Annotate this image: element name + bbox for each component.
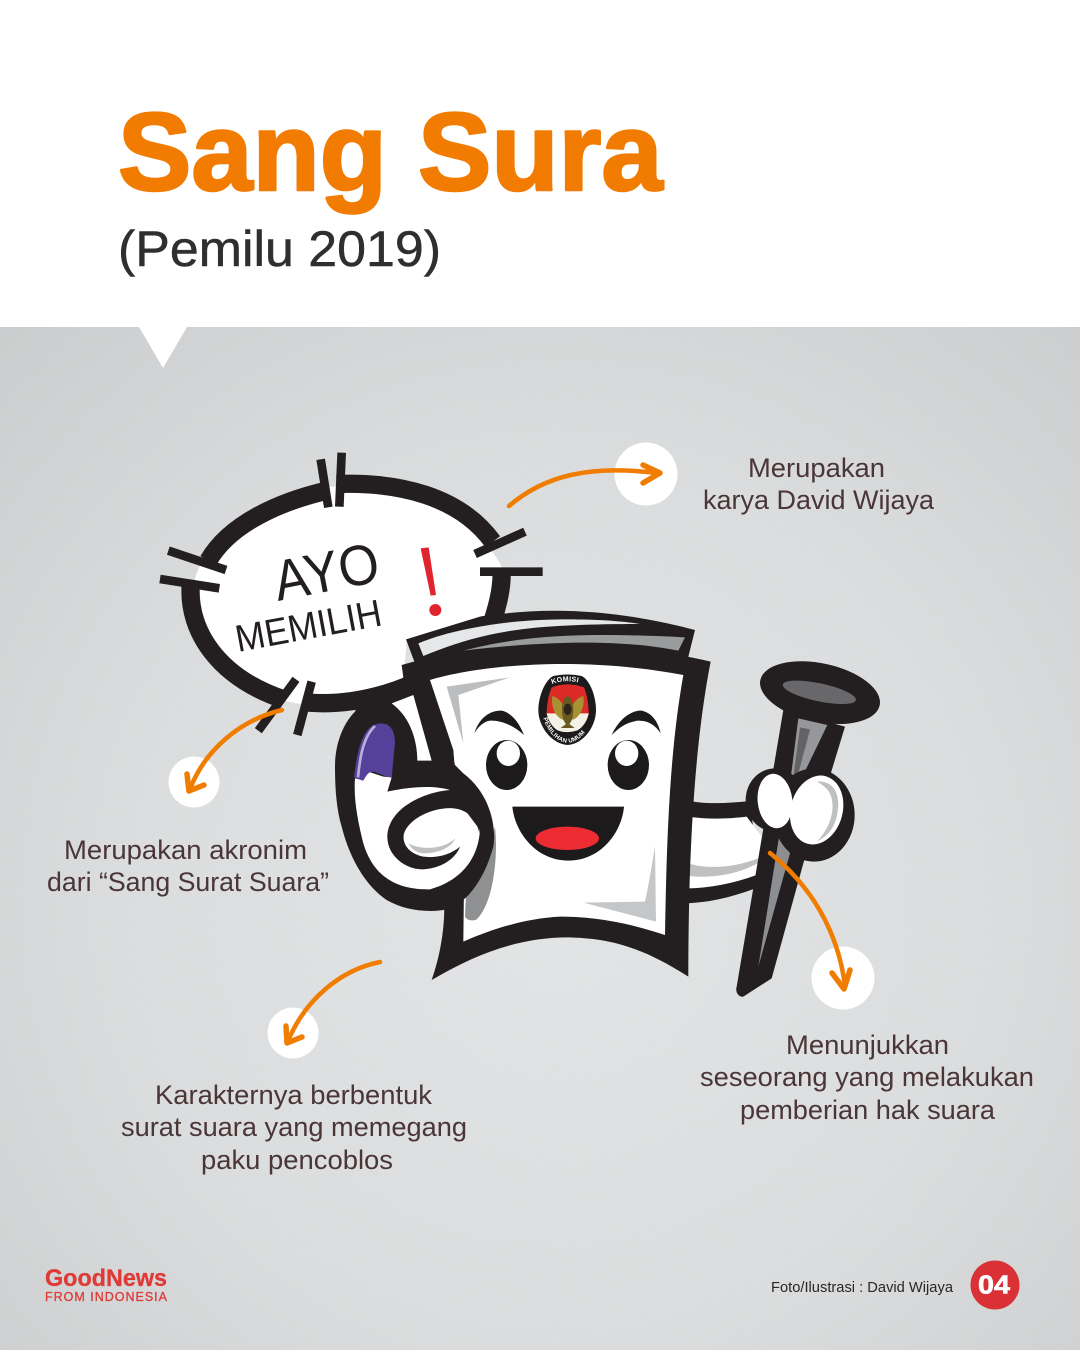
caption — [121, 1080, 467, 1175]
KPU emblem: KOMISI — [551, 676, 579, 684]
KPU emblem: PEMILIHAN UMUM — [544, 717, 585, 743]
logo: GoodNews from Indonesia: FROM INDONESIA — [45, 1290, 168, 1304]
arrow — [770, 853, 850, 989]
thumb shading — [408, 838, 455, 853]
callout: hak suara — [700, 853, 1034, 1125]
callout: David Wijaya — [509, 442, 935, 515]
callout: akronim — [47, 710, 329, 897]
caption: dari “Sang Surat Suara” — [47, 867, 329, 897]
arrow — [509, 465, 660, 506]
photo credit: Foto/Ilustrasi : David Wijaya — [771, 1280, 954, 1296]
illustration: speech bubble: MEMILIH — [232, 593, 385, 661]
right eyebrow — [612, 711, 661, 735]
caption: surat suara yang memegang — [121, 1112, 467, 1142]
arrow — [187, 710, 282, 791]
marker circle — [812, 946, 874, 1010]
paper shadow — [465, 827, 496, 920]
arrow — [286, 962, 380, 1043]
caption — [700, 1030, 1034, 1125]
caption — [703, 453, 935, 515]
panel: grey background — [0, 327, 1080, 1350]
KPU emblem — [538, 674, 596, 745]
speech notch — [139, 327, 187, 368]
left eye — [486, 740, 527, 790]
marker circle — [614, 442, 678, 506]
caption: paku pencoblos — [201, 1145, 393, 1175]
right eye — [608, 740, 649, 790]
caption: seseorang yang melakukan — [700, 1062, 1034, 1092]
illustration: speech bubble — [160, 453, 543, 735]
caption: Menunjukkan — [786, 1030, 949, 1060]
caption: Merupakan — [748, 453, 885, 483]
title: Sang — [118, 91, 387, 214]
ink highlight — [358, 726, 375, 777]
caption: pemberian hak suara — [740, 1095, 996, 1125]
illustration: ballot paper character — [402, 610, 711, 980]
purple ink — [354, 723, 395, 781]
subtitle: (Pemilu 2019) — [118, 221, 441, 277]
marker circle — [168, 756, 220, 808]
illustration: right arm — [680, 799, 762, 903]
paper gap — [392, 695, 432, 761]
caption: Karakternya berbentuk — [155, 1080, 432, 1110]
illustration: speech bubble: AYO — [268, 531, 385, 614]
caption: karya David Wijaya — [703, 485, 935, 515]
inked thumb hand — [335, 690, 496, 920]
caption: Merupakan akronim — [64, 835, 307, 865]
paper top fold — [406, 611, 695, 663]
left eyebrow — [474, 711, 524, 735]
caption — [47, 835, 329, 897]
page number badge: 04 — [978, 1272, 1011, 1300]
finger — [355, 772, 480, 889]
callout: karakter — [121, 962, 467, 1175]
logo: GoodNews from Indonesia: GoodNews — [45, 1265, 167, 1292]
illustration: ballot nail and fist — [736, 651, 886, 997]
panel: white header — [0, 0, 1080, 328]
curled thumb line — [387, 788, 482, 869]
hand outline — [335, 690, 494, 911]
paper body — [370, 646, 711, 980]
mouth — [512, 807, 624, 861]
page number badge — [970, 1260, 1020, 1310]
marker circle — [268, 1008, 318, 1058]
title: Sura — [418, 91, 663, 214]
logo: GoodNews from Indonesia — [45, 1265, 168, 1304]
